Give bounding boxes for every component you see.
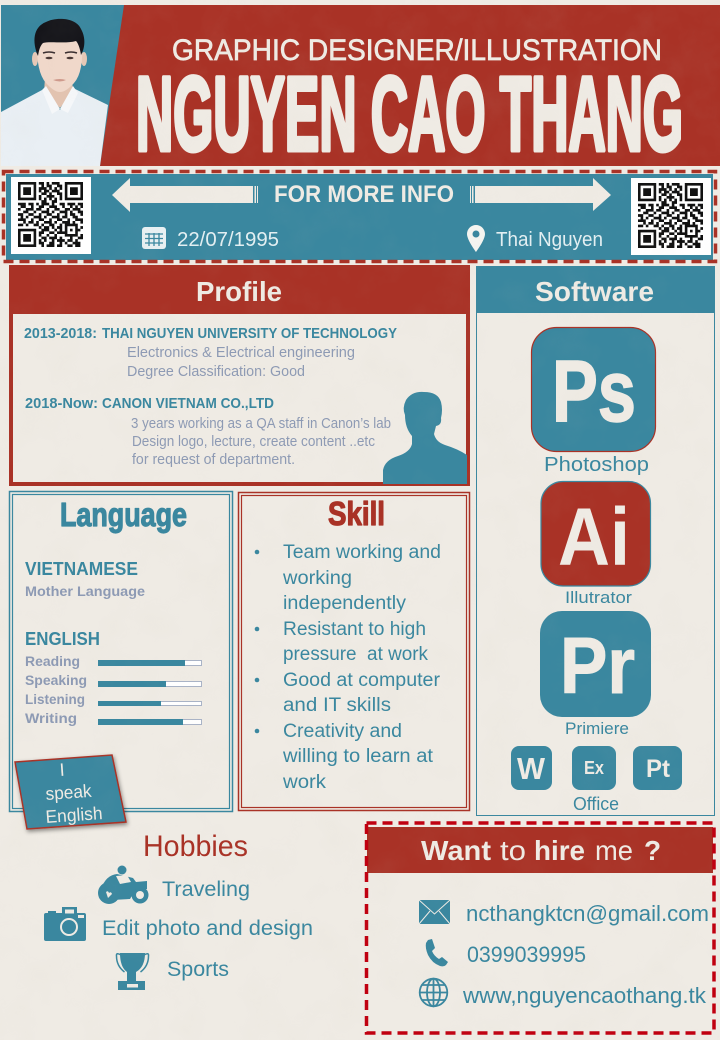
hire heading: [421, 835, 661, 866]
bullet list: Good at computer: [283, 670, 441, 691]
panel: profile: [9, 265, 470, 484]
sticker: I speak English: English: [45, 803, 103, 827]
bullet list: Team working and: [283, 542, 441, 563]
hire heading: Want: [421, 835, 491, 866]
sticker: I speak English: I: [59, 760, 65, 780]
major: Electronics & Electrical engineering: [127, 344, 355, 361]
hire heading: hire: [534, 835, 585, 866]
icon: globe: [420, 979, 447, 1007]
dashed border: [366, 823, 714, 1033]
language heading: Language: [60, 496, 187, 533]
icon: word: [511, 746, 552, 790]
bullet list: Creativity and: [283, 721, 402, 742]
traveling label: Traveling: [162, 878, 250, 901]
icon: powerpoint: Pt: [646, 755, 671, 783]
software frame: [476, 266, 714, 816]
icon: word: W: [517, 751, 546, 786]
info strip: [4, 172, 716, 262]
icon: premiere: Pr: [560, 621, 635, 710]
hire heading: to: [500, 835, 526, 866]
illustrator label: Illutrator: [565, 588, 632, 607]
degree: Degree Classification: Good: [127, 363, 305, 380]
profile frame: [11, 267, 468, 484]
icon: calendar: [142, 227, 166, 249]
bullet list: independently: [283, 593, 407, 614]
sports label: Sports: [167, 958, 229, 981]
sticker: I speak English: [15, 755, 126, 829]
header banner: [1, 5, 720, 173]
portrait photo: [1, 19, 108, 166]
office label: Office: [573, 794, 619, 814]
location: Thai Nguyen: [496, 229, 603, 251]
for more info: FOR MORE INFO: [274, 181, 454, 208]
icon: envelope: [419, 900, 450, 924]
hobbies heading: Hobbies: [143, 830, 248, 863]
red title panel: [100, 5, 720, 166]
icon: photoshop: Ps: [552, 343, 636, 440]
icon: map pin: [467, 225, 485, 252]
icon: camera: [44, 907, 86, 941]
speaking bar: [98, 681, 202, 687]
company: CANON VIETNAM CO.,LTD: [102, 395, 274, 412]
hire header: [367, 827, 713, 873]
writing label: Writing: [25, 710, 77, 726]
panel: language: [10, 492, 232, 829]
writing bar: [98, 719, 202, 725]
icon: person silhouette: [383, 392, 467, 484]
panel: skill: [238, 492, 470, 810]
icon: phone: [426, 939, 448, 966]
bullet list: working: [282, 568, 352, 589]
reading label: Reading: [25, 653, 80, 669]
icon: premiere: [540, 611, 651, 717]
bullet list: willing to learn at: [282, 746, 434, 767]
hire heading: me: [595, 835, 633, 866]
english: ENGLISH: [25, 629, 100, 649]
mother language: Mother Language: [25, 583, 145, 599]
right arrow: [470, 178, 611, 211]
icon: illustrator: Ai: [558, 492, 630, 583]
language border: [10, 492, 232, 812]
vietnamese: VIETNAMESE: [25, 559, 138, 579]
premiere label: Primiere: [565, 719, 629, 738]
speaking label: Speaking: [25, 672, 87, 688]
listening bar: [98, 701, 202, 706]
work line 1: 3 years working as a QA staff in Canon’s lab: [131, 416, 391, 432]
sticker: I speak English: speak: [45, 781, 93, 804]
edit photo label: Edit photo and design: [102, 917, 313, 940]
work period: 2018-Now:: [25, 395, 98, 412]
bullet list: [255, 542, 441, 793]
teal photo panel: [1, 5, 131, 166]
bullet list: and IT skills: [283, 695, 391, 716]
icon: excel: Ex: [584, 758, 604, 778]
right QR code: [631, 178, 711, 255]
listening label: Listening: [25, 691, 85, 707]
hire heading: ?: [644, 835, 661, 866]
birth date: 22/07/1995: [177, 229, 279, 251]
panel: hire me: [366, 823, 714, 1033]
work line 3: for request of department.: [132, 452, 295, 468]
reading bar: [98, 660, 202, 666]
work line 2: Design logo, lecture, create content ..etc: [132, 434, 375, 450]
bullet list: pressure at work: [283, 644, 428, 665]
skill heading: Skill: [328, 495, 385, 532]
panel: software: [476, 266, 715, 816]
icon: trophy: [116, 953, 149, 990]
left QR code: [11, 177, 91, 254]
icon: photoshop: [532, 328, 656, 452]
software header: [476, 266, 715, 313]
icon: excel: [572, 746, 616, 790]
left arrow: [112, 178, 258, 212]
dashed border: [4, 172, 716, 262]
website: www,nguyencaothang.tk: [462, 983, 707, 1008]
phone number: 0399039995: [467, 942, 586, 967]
university: THAI NGUYEN UNIVERSITY OF TECHNOLOGY: [102, 325, 397, 342]
teal strip: [6, 174, 713, 260]
job title: GRAPHIC DESIGNER/ILLUSTRATION: [172, 34, 662, 67]
profile header: [9, 265, 470, 314]
bullet list: work: [282, 772, 327, 793]
profile heading: Profile: [196, 276, 282, 307]
panel: hobbies: [44, 830, 313, 990]
icon: motorcycle: [98, 866, 148, 904]
bullet list: Resistant to high: [283, 619, 426, 640]
skill border: [238, 492, 470, 810]
photoshop label: Photoshop: [544, 454, 649, 476]
icon: powerpoint: [633, 746, 682, 790]
software heading: Software: [535, 276, 654, 307]
email: ncthangktcn@gmail.com: [466, 901, 709, 926]
icon: illustrator: [541, 482, 650, 586]
education period: 2013-2018:: [24, 325, 97, 342]
